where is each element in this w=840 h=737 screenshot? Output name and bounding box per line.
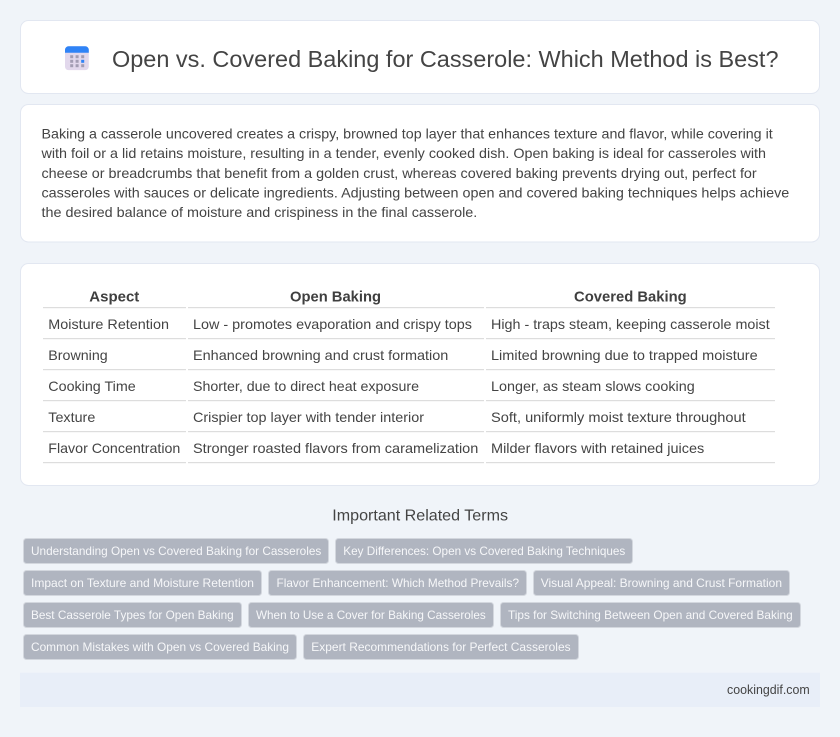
table row: browning: Enhanced browning and crust formation [193,347,448,363]
text block: introduction paragraph [40,126,790,220]
table row: browning [43,347,775,370]
chip: understanding: Understanding Open vs Covered Baking for Casseroles [31,544,321,558]
icon: calendar [65,46,89,70]
chip: visual appeal: Visual Appeal: Browning and Crust Formation [541,576,782,590]
chip: key differences [336,538,632,564]
table header row: Aspect [89,290,139,306]
chip: best casserole types: Best Casserole Types for Open Baking [31,608,234,622]
table row: browning: Limited browning due to trapped moisture [491,347,758,363]
chip: tips for switching: Tips for Switching Between Open and Covered Baking [508,608,793,622]
table row: texture [43,409,775,432]
chip: flavor enhancement [268,570,526,596]
table row: moisture retention: Low - promotes evaporation and crispy tops [193,316,472,332]
table row: cooking time: Shorter, due to direct heat exposure [193,378,419,394]
table row: moisture retention: Moisture Retention [48,316,169,332]
panel: introduction [20,104,820,242]
chip: key differences: Key Differences: Open vs Covered Baking Techniques [343,544,625,558]
table header row: Covered Baking [574,290,687,306]
table row: cooking time [43,378,775,401]
chip: visual appeal [534,570,790,596]
text block: introduction paragraph: casseroles with sauces or delicate ingredients. Adjusting between open and covered baking techniques helps achieve [42,184,790,200]
table row: flavor concentration: Stronger roasted flavors from caramelization [193,440,478,456]
chip: when to use a cover [248,602,494,628]
text block: introduction paragraph: with foil or a lid retains moisture, resulting in a tender, evenly cooked dish. Open baking is ideal for casseroles with [40,145,766,161]
chip: understanding [24,538,328,564]
table row: flavor concentration [43,440,775,463]
chip: when to use a cover: When to Use a Cover for Baking Casseroles [256,608,486,622]
title: Open vs. Covered Baking for Casserole: Which Method is Best? [112,46,778,72]
chip: expert recommendations [304,634,578,660]
text block: introduction paragraph: the desired balance of moisture and crispiness in the final casserole. [42,204,477,220]
table row: flavor concentration: Flavor Concentration [48,440,180,456]
chip: tips for switching [500,602,800,628]
chip: best casserole types [24,602,242,628]
chip: common mistakes [24,634,296,660]
table row: moisture retention: High - traps steam, keeping casserole moist [491,316,770,332]
table row: browning: Browning [48,347,108,363]
table header row: Open Baking [290,290,381,306]
chip: impact [24,570,262,596]
panel: comparison table [20,264,820,486]
footer [20,673,820,707]
chip: flavor enhancement: Flavor Enhancement: Which Method Prevails? [276,576,519,590]
table row: moisture retention [43,316,775,339]
panel: page header [20,20,820,94]
text block: introduction paragraph: cheese or breadcrumbs that benefit from a golden crust, whereas covered baking prevents drying out, perfect for [42,165,757,181]
chip: expert recommendations: Expert Recommendations for Perfect Casseroles [311,640,571,654]
heading: related terms: Important Related Terms [332,508,508,525]
footer source text: cookingdif.com [727,683,810,697]
table row: texture: Texture [48,409,96,425]
related terms chips [24,538,800,660]
text block: introduction paragraph: Baking a casserole uncovered creates a crispy, browned top layer that enhances texture and flavor, while covering it [42,126,773,142]
chip: common mistakes: Common Mistakes with Open vs Covered Baking [31,640,289,654]
chip: impact: Impact on Texture and Moisture Retention [31,576,254,590]
table header row [43,290,775,308]
table row: flavor concentration: Milder flavors with retained juices [491,440,704,456]
table row: cooking time: Longer, as steam slows cooking [491,378,695,394]
table row: cooking time: Cooking Time [48,378,136,394]
table row: texture: Crispier top layer with tender interior [193,409,424,425]
table row: texture: Soft, uniformly moist texture throughout [491,409,746,425]
